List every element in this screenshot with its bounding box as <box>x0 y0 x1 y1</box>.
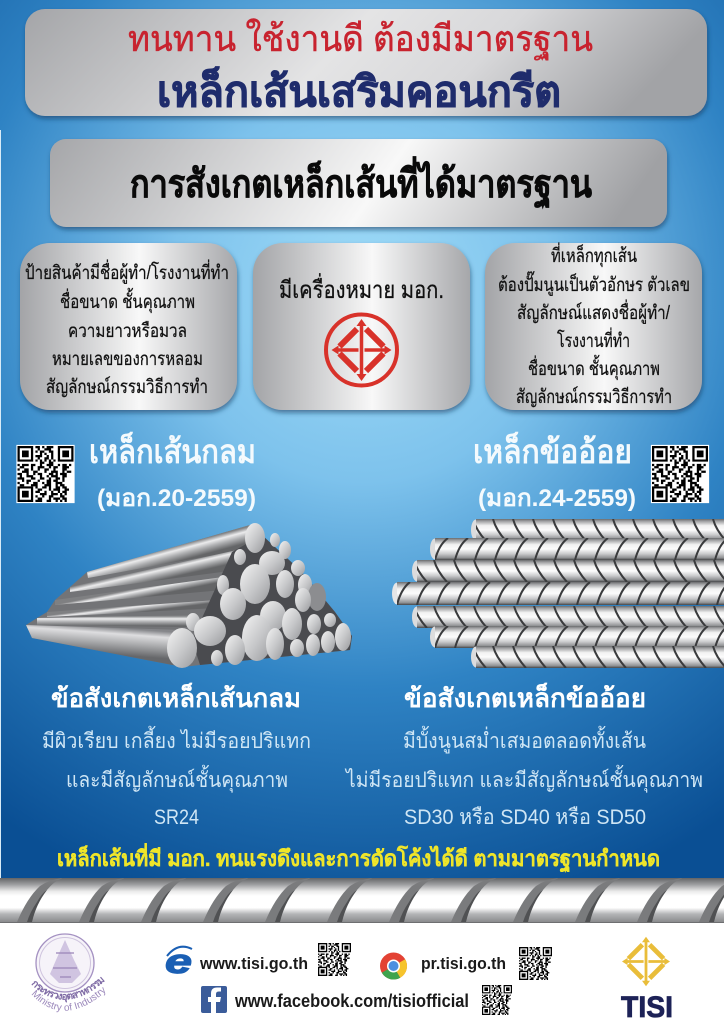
embossed marks text <box>498 242 690 408</box>
QR code: facebook <box>481 984 513 1016</box>
title panel <box>25 9 707 116</box>
text: deformed bar notes: SD30 หรือ SD40 หรือ SD50 <box>404 806 646 829</box>
QR code: deformed bar <box>651 445 709 503</box>
embossed marks text: ชื่อขนาด ชั้นคุณภาพ <box>528 355 660 381</box>
product label text: หมายเลขของการหลอม <box>52 349 203 370</box>
logo: Ministry of Industry <box>32 933 106 1012</box>
panel: TIS mark <box>253 243 470 410</box>
website: facebook: www.facebook.com/tisiofficial <box>234 991 469 1011</box>
icon: Facebook <box>201 986 227 1013</box>
text: deformed bar notes <box>344 726 703 829</box>
text: deformed bar notes: ไม่มีรอยปริแทก และมีสัญลักษณ์ชั้นคุณภาพ <box>344 765 703 793</box>
standard: round bar: (มอก.20-2559) <box>97 485 256 512</box>
embossed marks text: สัญลักษณ์แสดงชื่อผู้ทำ/ <box>517 299 671 324</box>
QR code: tisi <box>317 942 352 977</box>
logo: Ministry of Industry: Ministry of Industry <box>32 987 106 1012</box>
website: pr.tisi: pr.tisi.go.th <box>421 954 506 973</box>
subtitle text: การสังเกตเหล็กเส้นที่ได้มาตรฐาน <box>130 156 592 209</box>
steel bar strip <box>0 878 724 923</box>
icon: Internet Explorer: e <box>165 943 192 981</box>
heading: round bar notes: ข้อสังเกตเหล็กเส้นกลม <box>51 682 301 713</box>
text: round bar notes: และมีสัญลักษณ์ชั้นคุณภาพ <box>66 765 288 793</box>
logo: TISI: TISI <box>621 991 673 1024</box>
heading: deformed bar notes: ข้อสังเกตเหล็กข้ออ้อย <box>404 682 646 713</box>
product label text: ชื่อขนาด ชั้นคุณภาพ <box>60 288 195 314</box>
product label text: ความยาวหรือมวล <box>68 321 187 342</box>
illustration: stack of ribbed bars <box>392 519 724 668</box>
logo: TISI <box>621 937 673 1024</box>
illustration: pile of round bars <box>26 523 352 668</box>
panel: product label <box>20 243 237 410</box>
TIS mark text: มีเครื่องหมาย มอก. <box>279 273 444 304</box>
embossed marks text: โรงงานที่ทำ <box>557 327 630 352</box>
product label text: ป้ายสินค้ามีชื่อผู้ทำ/โรงงานที่ทำ <box>25 259 229 284</box>
embossed marks text: สัญลักษณ์กรรมวิธีการทำ <box>516 386 672 408</box>
subtitle panel <box>50 139 667 227</box>
product label text: สัญลักษณ์กรรมวิธีการทำ <box>46 376 208 398</box>
logo: Ministry of Industry: กระทรวงอุตสาหกรรม <box>32 976 105 1002</box>
panel: embossed marks <box>485 242 702 410</box>
text: deformed bar notes: มีบั้งนูนสม่ำเสมอตลอดทั้งเส้น <box>403 726 646 754</box>
text: round bar notes: SR24 <box>154 806 199 829</box>
product label text <box>25 259 229 398</box>
website: tisi: www.tisi.go.th <box>199 954 308 973</box>
title: navy headline: เหล็กเส้นเสริมคอนกรีต <box>157 66 561 115</box>
title: red headline: ทนทาน ใช้งานดี ต้องมีมาตรฐาน <box>128 18 593 61</box>
callout: yellow statement: เหล็กเส้นที่มี มอก. ทนแรงดึงและการดัดโค้งได้ดี ตามมาตรฐานกำหนด <box>57 842 660 873</box>
heading: round bar: เหล็กเส้นกลม <box>89 431 256 470</box>
embossed marks text: ที่เหล็กทุกเส้น <box>551 242 637 268</box>
heading: deformed bar: เหล็กข้ออ้อย <box>473 431 632 470</box>
text: round bar notes <box>42 726 311 829</box>
text: round bar notes: มีผิวเรียบ เกลี้ยง ไม่มีรอยปริแทก <box>42 726 311 753</box>
standard: deformed bar: (มอก.24-2559) <box>478 485 636 512</box>
footer background <box>0 923 724 1024</box>
icon: red TIS mark <box>326 314 397 386</box>
QR code: pr.tisi <box>518 946 553 981</box>
icon: Chrome <box>380 952 407 980</box>
QR code: round bar <box>16 445 75 503</box>
